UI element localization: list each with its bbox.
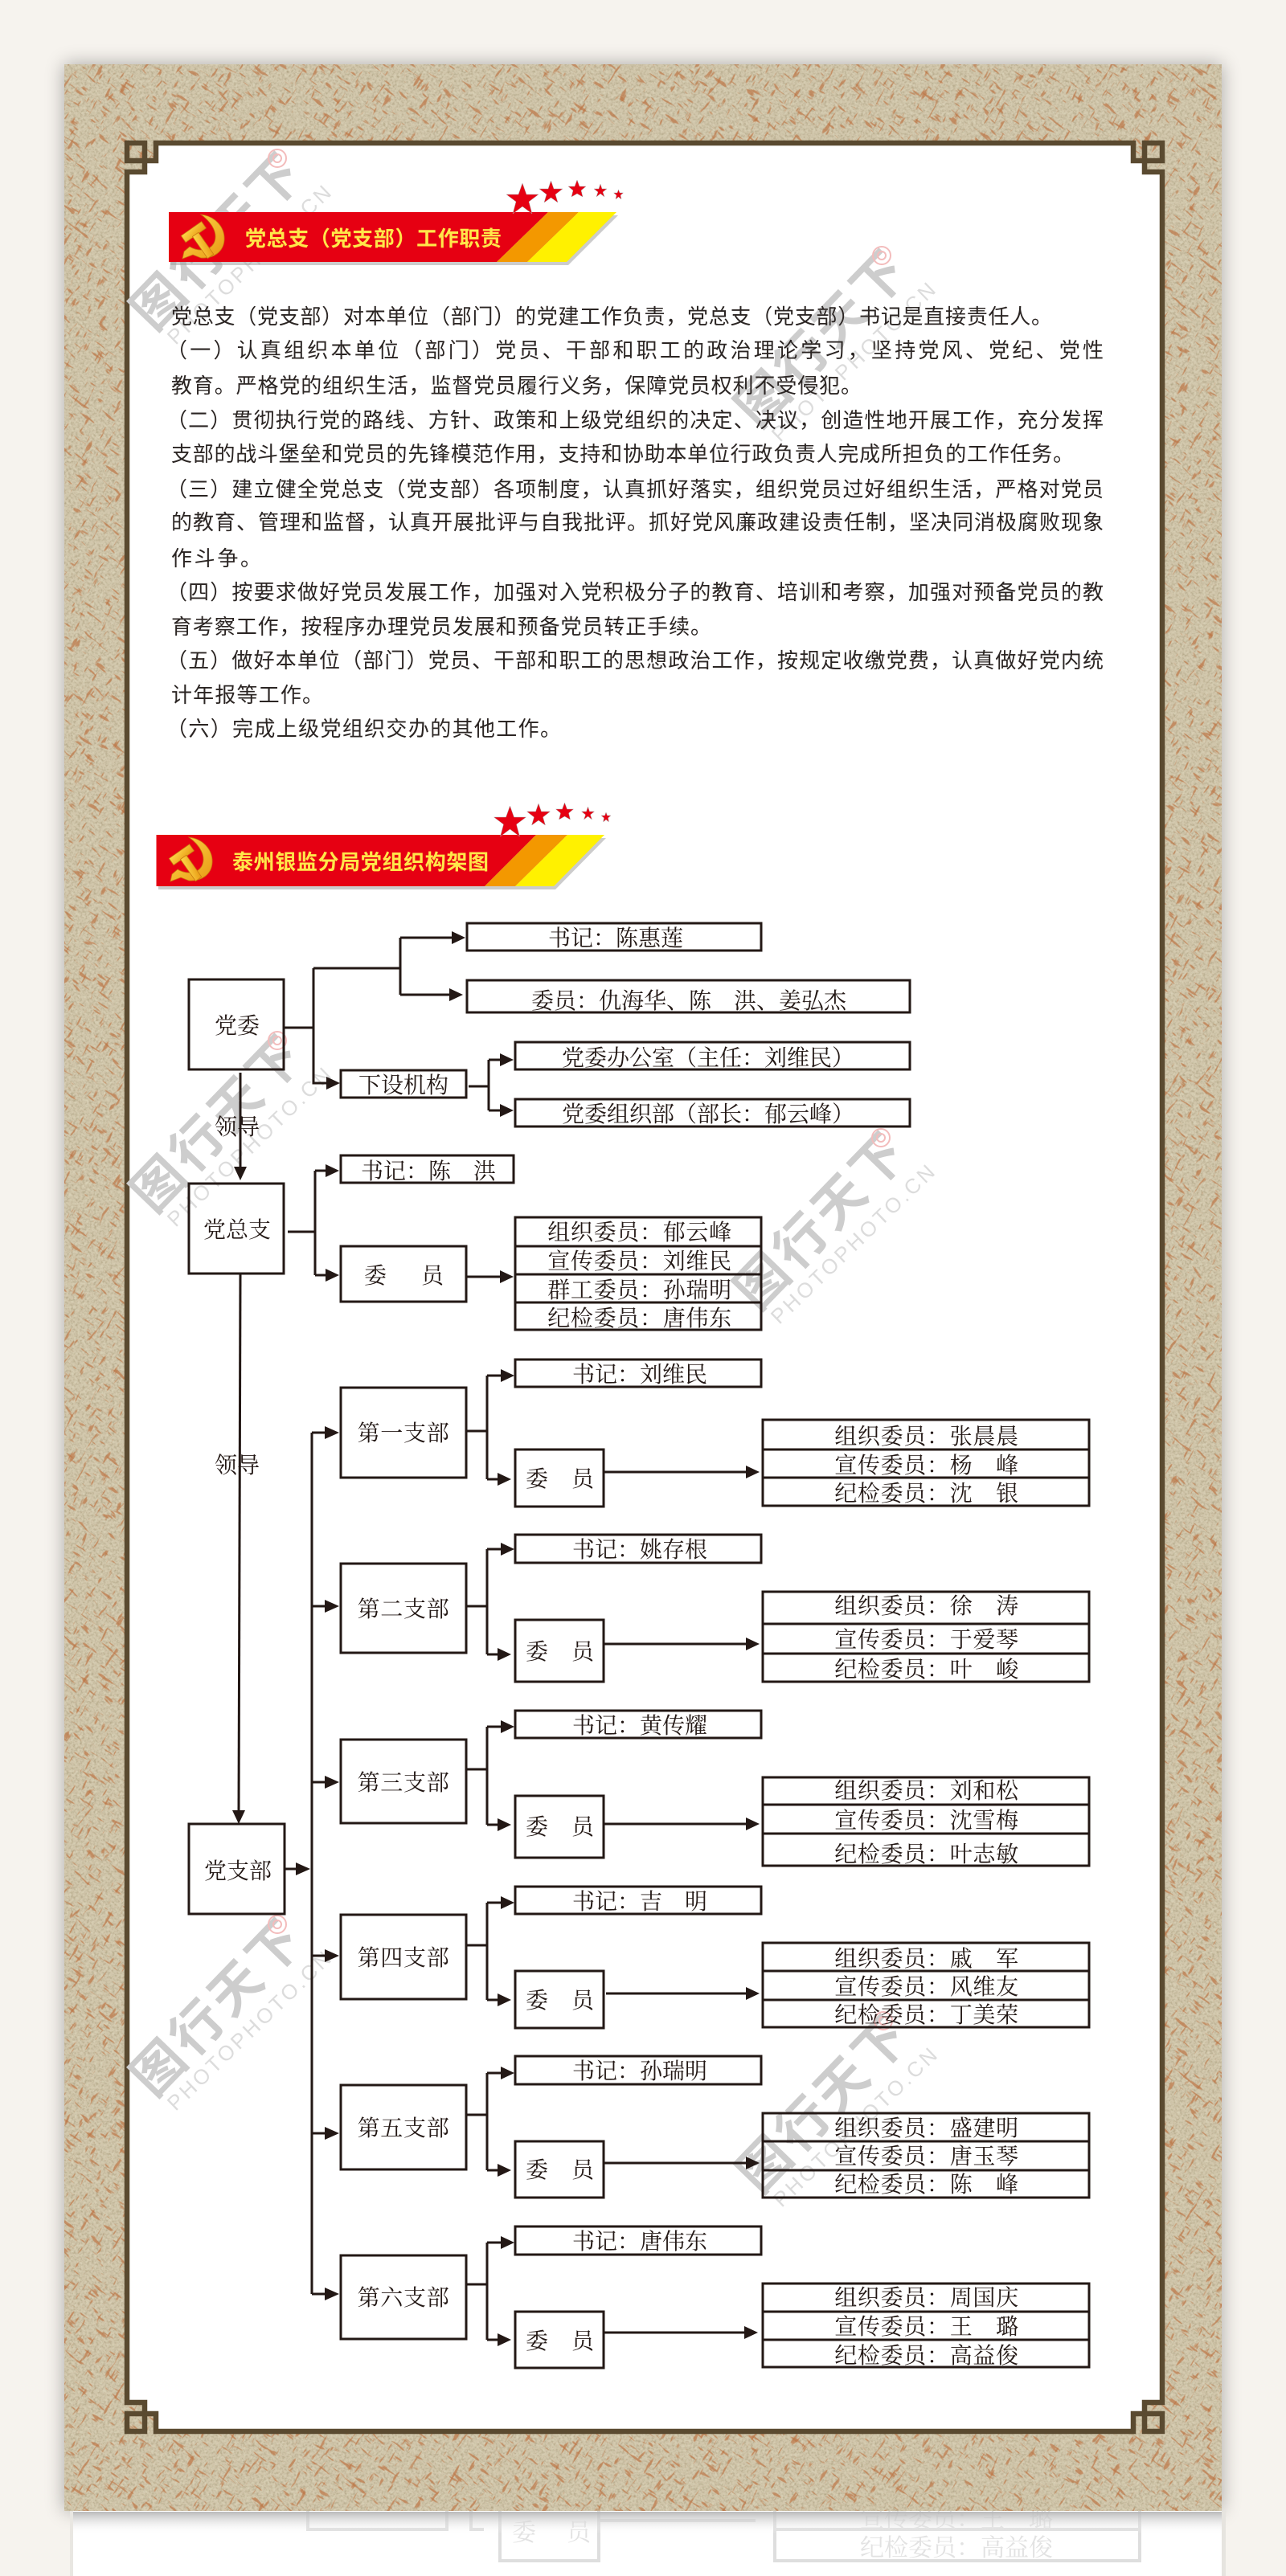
box: members: 委: [526, 1634, 548, 1666]
box: branch name: 第六支部: [358, 2280, 449, 2312]
box: party office: 党委办公室（主任：刘维民）: [562, 1041, 854, 1073]
reflection: ghost text: 纪检委员：高益俊: [860, 2528, 1053, 2563]
watermark middle left: PHOTOPHOTO.CN: [162, 1063, 336, 1231]
duties text block: （六）完成上级党组织交办的其他工作。: [166, 713, 561, 742]
watermark top left: 图行天下: [112, 133, 319, 343]
reflection: ghost text: 委: [512, 2513, 536, 2548]
list: branch members: 纪检委员：叶志敏: [834, 1837, 1019, 1869]
list: branch members: [763, 1589, 1089, 1684]
box: branch name: 第三支部: [358, 1765, 449, 1797]
list: branch members: 纪检委员：丁美荣: [834, 1997, 1019, 2030]
branch four: [312, 1884, 1089, 2030]
box: members: 委: [526, 2324, 548, 2356]
box: members: 员: [571, 1634, 596, 1666]
box: secretary: [515, 2224, 761, 2256]
box: secretary: 书记：黄传耀: [572, 1708, 707, 1740]
watermark lower right: 图行天下: [718, 1995, 925, 2206]
banner title: 泰州银监分局党组织构架图: [232, 846, 489, 876]
box: branch name: [341, 2085, 466, 2169]
box: members: 委: [526, 1983, 548, 2015]
list: general branch members: [515, 1215, 761, 1333]
duties text block: 作斗争。: [171, 542, 261, 572]
box: members: 员: [571, 1983, 596, 2015]
list: branch members: [763, 2280, 1089, 2370]
arrow: leads down to general branch: [215, 1073, 260, 1180]
branch connectors: [312, 2236, 758, 2346]
duties text block: [166, 301, 1104, 742]
box: committee members: [467, 980, 910, 1016]
connectors from general branch: [288, 1164, 339, 1282]
box: branch name: 第一支部: [358, 1416, 449, 1448]
banner title: 党总支（党支部）工作职责: [245, 223, 502, 252]
box: members: 员: [571, 1809, 596, 1842]
list: branch members: 纪检委员：陈 峰: [834, 2167, 1019, 2199]
list: branch members: 纪检委员：沈 银: [834, 1476, 1019, 1508]
org chart: party committee section: [189, 921, 910, 1129]
list: branch members: 组织委员：盛建明: [834, 2111, 1019, 2143]
icon: hammer and sickle emblem: [181, 215, 224, 264]
box: members: 员: [571, 1462, 596, 1494]
list: branch members: 宣传委员：沈雪梅: [834, 1803, 1019, 1835]
box: members: 员: [421, 1258, 445, 1290]
duties text block: 支部的战斗堡垒和党员的先锋模范作用，支持和协助本单位行政负责人完成所担负的工作任务。: [171, 438, 1074, 468]
banner: organisation chart heading: [156, 803, 611, 889]
list: branch members: 宣传委员：杨 峰: [834, 1448, 1019, 1480]
icon: five stars: [506, 180, 624, 214]
box: branch name: 第四支部: [358, 1940, 449, 1973]
watermark lower right: PHOTOPHOTO.CN: [768, 2043, 942, 2211]
list: branch members: 宣传委员：风维友: [834, 1969, 1019, 2002]
list: branch members: [763, 1773, 1089, 1869]
branch connectors: [312, 1543, 760, 1661]
list: branch members: 纪检委员：叶 峻: [834, 1652, 1019, 1684]
icon: hammer and sickle emblem: [169, 837, 212, 886]
duties text block: 党总支（党支部）对本单位（部门）的党建工作负责，党总支（党支部）书记是直接责任人。: [171, 301, 1052, 330]
branch connectors: [312, 1896, 760, 2006]
duties text block: （三）建立健全党总支（党支部）各项制度，认真抓好落实，组织党员过好组织生活，严格对党员: [166, 473, 1104, 503]
list: general branch members: 组织委员：郁云峰: [547, 1215, 732, 1247]
duties text block: 育考察工作，按程序办理党员发展和预备党员转正手续。: [171, 611, 711, 640]
box: secretary: [515, 1532, 761, 1564]
branch one: [312, 1357, 1089, 1508]
box: secretary: 书记：孙瑞明: [572, 2054, 707, 2086]
box: members: 委: [526, 2153, 548, 2185]
box: branch name: [341, 1915, 466, 1999]
duties text block: 的教育、管理和监督，认真开展批评与自我批评。抓好党风廉政建设责任制，坚决同消极腐败现象: [171, 506, 1104, 536]
box: members: 委: [526, 1809, 548, 1842]
duties text block: 教育。严格党的组织生活，监督党员履行义务，保障党员权利不受侵犯。: [171, 370, 862, 399]
reflection: ghost boxes: [308, 2511, 1140, 2561]
box: branch name: [341, 2255, 466, 2339]
list: branch members: 组织委员：戚 军: [834, 1941, 1019, 1973]
box: members: [515, 2141, 604, 2198]
box: secretary: [515, 1884, 761, 1916]
box: members: [515, 1796, 604, 1858]
reflection below panel: [70, 2499, 1226, 2576]
org chart: general branch section: [189, 1154, 761, 1333]
box: secretary: [515, 1708, 761, 1740]
watermark middle right: 图行天下: [715, 1112, 923, 1323]
list: branch members: 组织委员：张晨晨: [834, 1419, 1019, 1451]
watermark top right: PHOTOPHOTO.CN: [767, 278, 940, 446]
box: secretary: 书记：陈惠莲: [548, 921, 683, 953]
list: branch members: 组织委员：刘和松: [834, 1773, 1019, 1805]
reflection: ghost text: [512, 2499, 1053, 2563]
list: branch members: 宣传委员：唐玉琴: [834, 2139, 1019, 2171]
duties text block: （二）贯彻执行党的路线、方针、政策和上级党组织的决定、决议，创造性地开展工作，充分发挥: [166, 404, 1104, 434]
label: leadership: 领导: [215, 1110, 260, 1142]
box: committee members: 委员：仇海华、陈 洪、姜弘杰: [531, 983, 847, 1016]
list: branch members: 纪检委员：高益俊: [834, 2338, 1019, 2370]
box: members: 委: [364, 1258, 387, 1290]
box: secretary: [515, 2054, 761, 2086]
box: organisation department: 党委组织部（部长：郁云峰）: [562, 1097, 854, 1129]
reflection: ghost text: 员: [567, 2513, 592, 2548]
box: branch name: [341, 1388, 466, 1478]
box: members: [341, 1246, 466, 1302]
duties text block: （四）按要求做好党员发展工作，加强对入党积极分子的教育、培训和考察，加强对预备党员的教: [166, 576, 1104, 606]
box: secretary: [467, 921, 761, 953]
branch connectors: [312, 2067, 760, 2177]
connectors from party committee: [285, 931, 465, 1090]
duties text block: （一）认真组织本单位（部门）党员、干部和职工的政治理论学习，坚持党风、党纪、党性: [166, 334, 1104, 364]
box: party committee: [189, 979, 284, 1069]
label: leadership: 领导: [215, 1448, 260, 1480]
branch six: [312, 2224, 1089, 2370]
box: general branch: [189, 1184, 284, 1274]
branch connectors: [312, 1720, 760, 1831]
list: branch members: 宣传委员：王 璐: [834, 2309, 1019, 2341]
branch five: [312, 2054, 1089, 2199]
list: branch members: 组织委员：周国庆: [834, 2280, 1019, 2312]
branch two: [312, 1532, 1089, 1684]
box: branch name: 第五支部: [358, 2111, 449, 2143]
box: members: [515, 2312, 604, 2368]
org chart: party branches box: [189, 1824, 285, 1914]
list: branch members: [763, 2111, 1089, 2199]
list: general branch members: 群工委员：孙瑞明: [547, 1273, 732, 1305]
org chart: party branches box: 党支部: [204, 1854, 272, 1886]
box: secretary: [515, 1357, 761, 1389]
watermark middle left: 图行天下: [112, 1015, 319, 1225]
watermark middle right: PHOTOPHOTO.CN: [766, 1160, 940, 1328]
connectors from subordinate bodies: [469, 1053, 514, 1117]
box: subordinate bodies: 下设机构: [358, 1068, 448, 1100]
box: secretary: 书记：唐伟东: [572, 2224, 707, 2256]
banner: work duties heading: [169, 180, 624, 265]
box: members: 员: [571, 2324, 596, 2356]
box: branch name: [341, 1740, 466, 1823]
branch connectors: [312, 1369, 760, 1486]
watermark top left: PHOTOPHOTO.CN: [162, 181, 336, 349]
box: secretary: 书记：陈 洪: [361, 1154, 496, 1186]
arrow to member list: [467, 1270, 514, 1283]
box: secretary: 书记：吉 明: [572, 1884, 707, 1916]
box: members: [515, 1971, 604, 2028]
box: members: [515, 1450, 604, 1507]
box: members: 员: [571, 2153, 596, 2185]
box: general branch: 党总支: [203, 1212, 271, 1245]
watermark lower left: PHOTOPHOTO.CN: [162, 1947, 336, 2115]
list: branch members: 宣传委员：于爱琴: [834, 1622, 1019, 1654]
branch trunk with arrow: [285, 1433, 312, 2294]
decorative frame with white content area: [127, 143, 1162, 2431]
box: secretary: 书记：姚存根: [572, 1532, 707, 1564]
list: branch members: 组织委员：徐 涛: [834, 1589, 1019, 1621]
arrow: leads down to party branches: [215, 1274, 260, 1824]
watermark lower left: 图行天下: [112, 1899, 319, 2109]
box: secretary: 书记：刘维民: [572, 1357, 707, 1389]
box: members: [515, 1620, 604, 1682]
duties text block: （五）做好本单位（部门）党员、干部和职工的思想政治工作，按规定收缴党费，认真做好党内统: [166, 644, 1104, 674]
watermark top right: 图行天下: [716, 230, 924, 440]
icon: five stars: [494, 803, 611, 836]
duties text block: 计年报等工作。: [171, 679, 323, 709]
list: general branch members: 纪检委员：唐伟东: [547, 1301, 732, 1333]
list: branch members: [763, 1419, 1089, 1508]
branch three: [312, 1708, 1089, 1869]
box: branch name: [341, 1564, 466, 1653]
list: branch members: [763, 1941, 1089, 2030]
box: party committee: 党委: [215, 1008, 260, 1041]
box: members: 委: [526, 1462, 548, 1494]
box: branch name: 第二支部: [358, 1592, 449, 1624]
reflection: ghost text: 宣传委员：王 璐: [860, 2499, 1053, 2534]
list: general branch members: 宣传委员：刘维民: [547, 1244, 732, 1276]
